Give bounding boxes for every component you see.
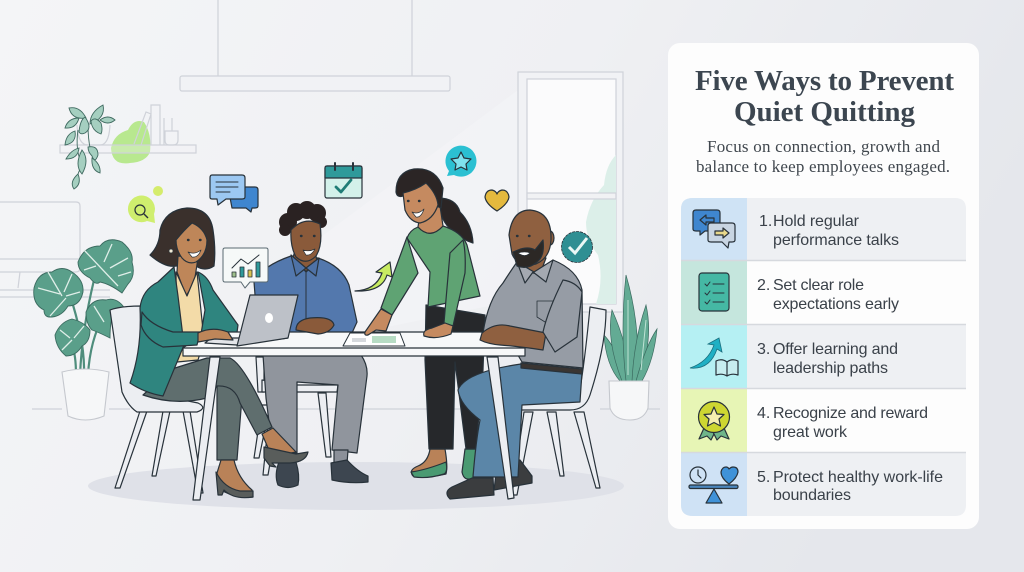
right leg [487, 357, 514, 499]
icon: magnifier bubble [128, 195, 155, 223]
room: floor line [32, 408, 660, 410]
right plant pot [609, 381, 649, 420]
subtitle: Focus on connection, growth and [707, 137, 940, 156]
seated woman near sleeve [141, 312, 200, 347]
ankle and heel [217, 460, 253, 497]
ear [546, 231, 554, 245]
shelf with plant and books [60, 105, 196, 189]
person: seated woman [130, 208, 308, 498]
grey trousers [263, 355, 367, 453]
green blob [111, 121, 150, 163]
laptop [205, 295, 298, 346]
chair: middle man [254, 357, 338, 475]
row 4 swatch [681, 388, 747, 452]
icon: small dot [153, 186, 163, 196]
table [183, 332, 525, 500]
row separators [681, 260, 966, 452]
shelf objects [60, 105, 196, 153]
panel: five ways card [668, 43, 979, 529]
hands and arms on table [141, 240, 582, 352]
seated woman hand [198, 329, 233, 342]
head [509, 210, 551, 265]
upper foot [262, 428, 296, 457]
item 3: leadership paths [773, 360, 888, 377]
middle man's clasped hands [296, 318, 334, 334]
neck [293, 250, 317, 272]
row 5 swatch [681, 452, 747, 516]
item 3: 3. [757, 341, 770, 358]
icon: calendar [325, 163, 362, 198]
item 5: boundaries [773, 487, 851, 504]
socks [334, 450, 348, 464]
teal jacket [130, 267, 184, 396]
collar [291, 255, 319, 276]
plant pot left [62, 369, 109, 420]
smile [188, 250, 201, 257]
woman hair [150, 208, 215, 269]
smile [518, 252, 530, 256]
beard [513, 240, 543, 267]
tabletop [183, 332, 525, 356]
green sweater [407, 226, 480, 307]
card background [668, 43, 979, 529]
hair [396, 169, 443, 208]
left arm [381, 237, 418, 315]
pointing hand [365, 309, 392, 335]
front leg [217, 384, 242, 460]
leaf veins [38, 244, 131, 350]
row 3 swatch [681, 324, 747, 388]
collar [517, 260, 553, 283]
smile [412, 209, 424, 217]
row backgrounds [681, 198, 966, 516]
neck [418, 206, 443, 233]
shirt pocket [537, 301, 553, 322]
icon: checklist [699, 273, 729, 311]
icon: check badge [562, 232, 592, 262]
far sleeve [198, 272, 238, 340]
leaves [34, 240, 133, 356]
eyes [517, 235, 530, 237]
grey shirt [483, 260, 583, 368]
front shoe [447, 478, 494, 499]
subtitle: balance to keep employees engaged. [696, 157, 950, 176]
cream blouse [176, 272, 204, 362]
eyes [188, 239, 200, 241]
room: wall monitor and console [0, 202, 110, 297]
smile [303, 249, 315, 255]
item 1: performance talks [773, 232, 899, 249]
black trousers [425, 305, 485, 449]
icon: two speech bubbles [693, 210, 735, 248]
feet [411, 449, 447, 477]
icon: medal [698, 402, 730, 440]
item 5: Protect healthy work-life [773, 469, 943, 486]
crossed leg [143, 358, 272, 435]
standing woman hand [424, 323, 453, 338]
light beam [250, 90, 518, 345]
item 1: 1. [759, 213, 772, 230]
person: standing woman [381, 169, 485, 479]
person: middle man [254, 201, 368, 488]
item 4: Recognize and reward [773, 405, 928, 422]
title: Five Ways to Prevent [695, 65, 954, 97]
item 2: 2. [757, 277, 770, 294]
monstera plant [34, 240, 133, 375]
item 5: 5. [757, 469, 770, 486]
standing woman sleeve [444, 240, 465, 326]
neck [177, 256, 198, 296]
face [176, 223, 207, 263]
icon: arrow and book [690, 338, 738, 376]
row 2 swatch [681, 260, 747, 324]
icon: chart card [223, 248, 268, 288]
eyes [301, 235, 314, 237]
icon: green arrow [355, 262, 392, 291]
list table [681, 198, 966, 516]
back shoe [494, 460, 532, 490]
floor shadow [88, 462, 624, 510]
room: window [518, 72, 623, 312]
earring [169, 249, 173, 253]
room: ceiling lamp [180, 0, 450, 91]
item 1: Hold regular [773, 213, 860, 230]
chair: bald man [510, 307, 606, 495]
bald man's forearm [480, 325, 546, 350]
trailing plant [65, 105, 115, 189]
item 4: great work [773, 424, 848, 441]
blue jeans [458, 364, 582, 477]
row 1 swatch [681, 198, 747, 260]
right shoe [331, 460, 368, 483]
curly hair [279, 201, 327, 236]
neck [521, 258, 546, 274]
person: bald man [447, 210, 583, 499]
chair: woman left [110, 306, 203, 493]
icon: chat bubbles [210, 175, 258, 212]
title: Quiet Quitting [734, 96, 916, 128]
face [291, 221, 321, 261]
belt [521, 363, 582, 374]
icon: heart [485, 190, 509, 211]
left leg [193, 357, 220, 500]
item 2: expectations early [773, 296, 899, 313]
icon: star bubble [445, 146, 476, 177]
ponytail [438, 198, 473, 243]
face [403, 183, 438, 223]
item 4: 4. [757, 405, 770, 422]
left shoe [276, 462, 299, 488]
bald man's sleeve [543, 280, 582, 352]
right snake plant [604, 275, 657, 381]
item 2: Set clear role [773, 277, 864, 294]
eyes [408, 200, 420, 202]
blue shirt [254, 256, 357, 333]
stems [72, 280, 104, 375]
item 3: Offer learning and [773, 341, 898, 358]
paper on table [343, 333, 405, 346]
icon: balance [689, 467, 738, 503]
